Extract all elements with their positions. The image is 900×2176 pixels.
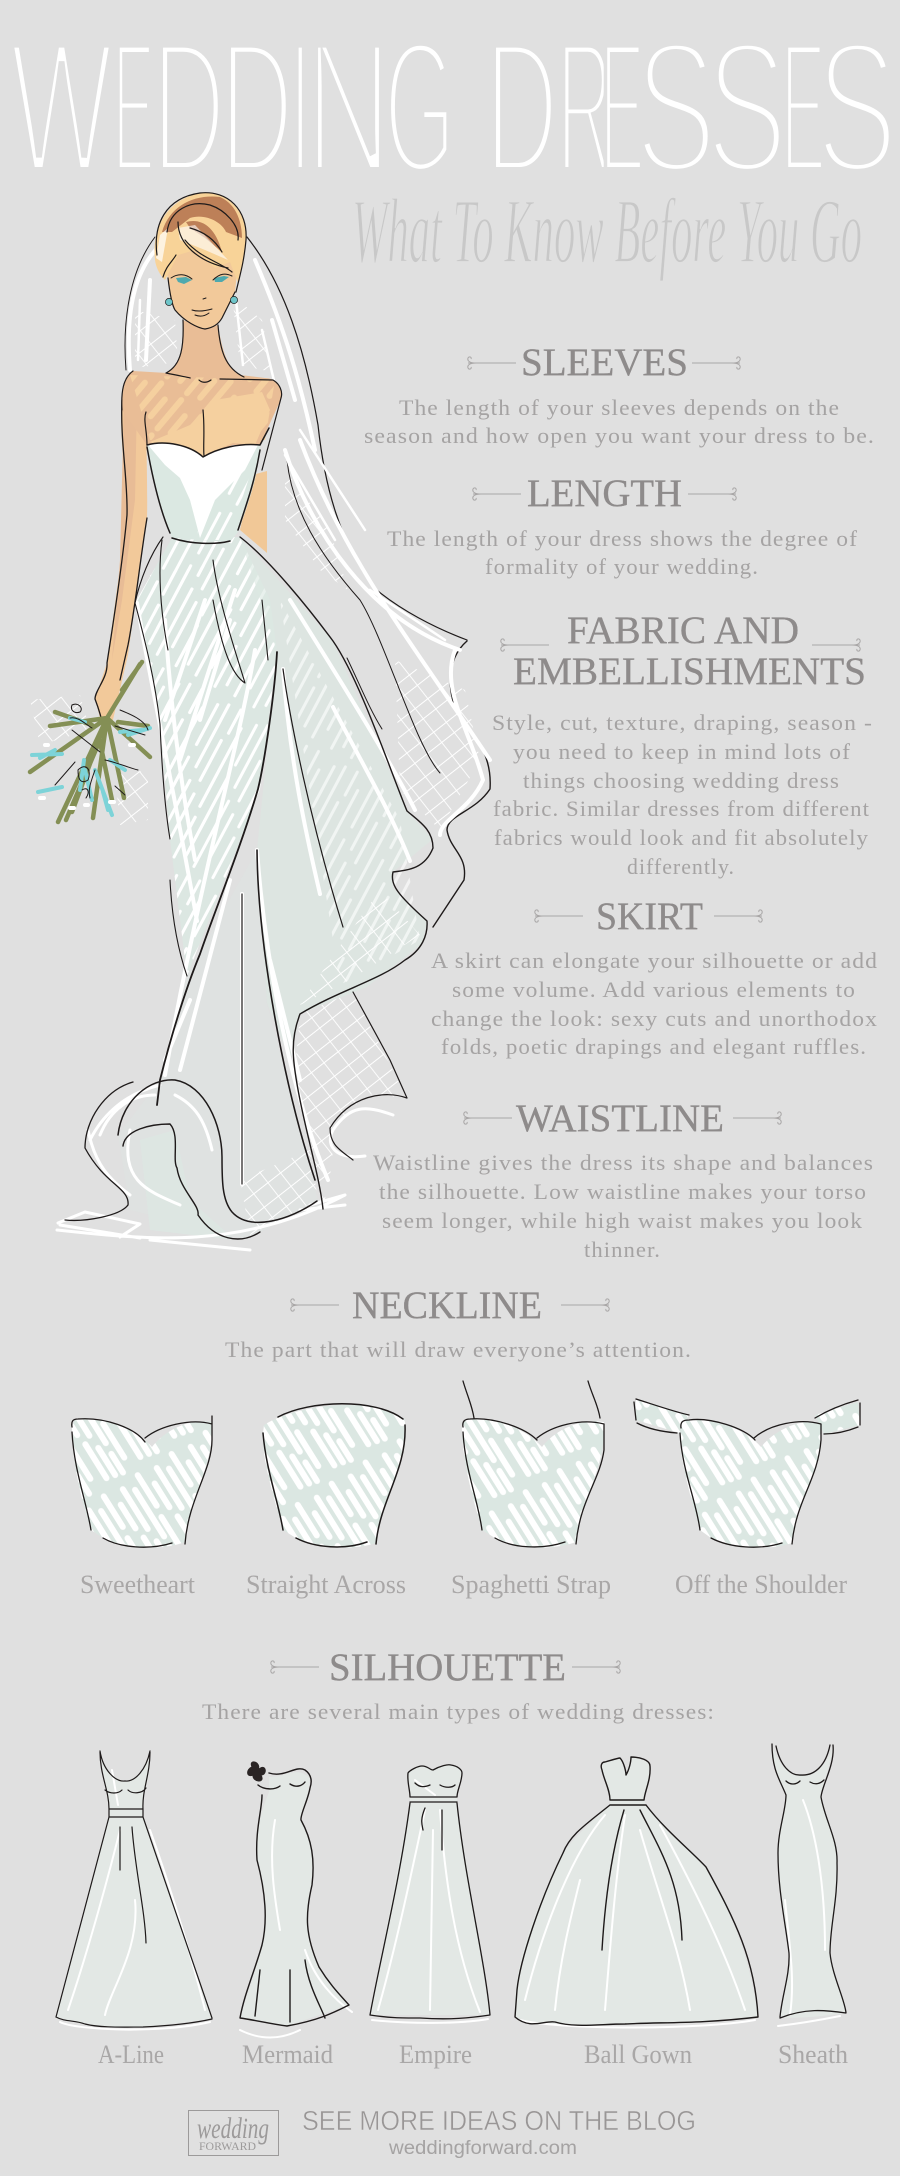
heading: EMBELLISHMENTS	[513, 650, 866, 693]
body text: fabrics would look and fit absolutely	[494, 825, 869, 850]
section: sleeves	[364, 341, 875, 448]
title: E	[781, 2, 826, 212]
ornament right	[688, 488, 736, 500]
heading: SILHOUETTE	[329, 1646, 566, 1689]
heading: SLEEVES	[521, 341, 688, 384]
body text: differently.	[627, 854, 735, 879]
left arm and hand	[95, 400, 147, 730]
title	[10, 2, 898, 212]
silhouette: mermaid	[240, 1762, 352, 2038]
silhouette: a-line	[56, 1751, 212, 2030]
section: skirt	[431, 895, 878, 1059]
body text: A skirt can elongate your silhouette or add	[431, 948, 878, 973]
neckline labels: Sweetheart	[80, 1570, 196, 1599]
title: S	[816, 2, 898, 212]
body text: Waistline gives the dress its shape and balances	[373, 1150, 874, 1175]
skirt	[57, 537, 433, 1250]
silhouette: sheath	[772, 1744, 846, 2026]
title: N	[305, 2, 392, 212]
torso skin	[122, 320, 282, 470]
body text: Style, cut, texture, draping, season -	[492, 710, 873, 735]
ornament left	[271, 1661, 319, 1673]
heading: WAISTLINE	[516, 1097, 724, 1140]
ornament left	[291, 1299, 339, 1311]
body text: fabric. Similar dresses from different	[493, 796, 870, 821]
title: S	[635, 2, 717, 212]
neckline: spaghetti strap	[462, 1381, 604, 1548]
title: D	[485, 2, 558, 212]
ornament left	[473, 488, 521, 500]
title: R	[557, 2, 613, 212]
title: I	[289, 2, 311, 212]
silhouette labels	[98, 2040, 848, 2069]
neckline labels	[80, 1570, 847, 1599]
bodice	[147, 428, 269, 543]
body text	[431, 948, 878, 1059]
body text: you need to keep in mind lots of	[513, 739, 851, 764]
title: E	[113, 2, 154, 212]
body text: things choosing wedding dress	[523, 768, 840, 793]
title: D	[220, 2, 293, 212]
title: E	[600, 2, 645, 212]
body text	[492, 710, 873, 879]
body text: thinner.	[584, 1237, 661, 1262]
head and hair	[155, 193, 246, 329]
silhouette labels: Empire	[399, 2040, 472, 2069]
ornament right	[714, 910, 762, 922]
body text	[387, 526, 858, 579]
heading: SKIRT	[596, 895, 703, 938]
section: fabric and embellishments	[492, 609, 873, 879]
heading: LENGTH	[527, 472, 682, 515]
heading: NECKLINE	[352, 1284, 542, 1327]
heading	[513, 609, 866, 693]
right arm	[240, 471, 267, 553]
flower	[248, 1762, 265, 1781]
body text: The part that will draw everyone’s attention.	[225, 1337, 692, 1362]
body text: The length of your dress shows the degree of	[387, 526, 858, 551]
section: waistline	[373, 1097, 874, 1262]
footer call to action: SEE MORE IDEAS ON THE BLOG	[302, 2105, 696, 2136]
title: W	[10, 2, 113, 212]
body text: The length of your sleeves depends on the	[399, 395, 840, 420]
body text: change the look: sexy cuts and unorthodox	[431, 1006, 878, 1031]
body text: season and how open you want your dress to be.	[364, 423, 875, 448]
silhouette labels: Mermaid	[242, 2040, 333, 2069]
ornament left	[535, 910, 583, 922]
body text: formality of your wedding.	[485, 554, 759, 579]
silhouette: empire	[370, 1765, 490, 2023]
logo: wedding forward	[188, 2110, 278, 2156]
neckline: sweetheart	[72, 1416, 212, 1548]
title: S	[706, 2, 788, 212]
title: D	[152, 2, 225, 212]
title: G	[384, 2, 456, 212]
ornament left	[464, 1112, 512, 1124]
section: length	[387, 472, 858, 579]
neckline: straight across	[263, 1404, 405, 1548]
illustration: bride in wedding dress	[30, 193, 490, 1250]
ornament right	[572, 1661, 620, 1673]
neckline: off the shoulder	[634, 1399, 860, 1548]
body text: some volume. Add various elements to	[452, 977, 856, 1002]
neckline labels: Straight Across	[246, 1570, 406, 1599]
section: neckline	[225, 1284, 692, 1362]
ornament left	[501, 639, 549, 651]
body text: the silhouette. Low waistline makes your torso	[379, 1179, 867, 1204]
silhouette: ball gown	[515, 1757, 758, 2028]
silhouette labels: Ball Gown	[584, 2040, 692, 2069]
ornament left	[468, 357, 516, 369]
section: silhouette	[202, 1646, 715, 1724]
bouquet	[30, 662, 150, 825]
heading: FABRIC AND	[567, 609, 799, 652]
silhouette labels: Sheath	[778, 2040, 848, 2069]
logo: wedding forward: wedding	[197, 2112, 269, 2145]
body text	[373, 1150, 874, 1262]
neckline labels: Spaghetti Strap	[451, 1570, 611, 1599]
neckline labels: Off the Shoulder	[675, 1570, 847, 1599]
body text: There are several main types of wedding dresses:	[202, 1699, 715, 1724]
body text	[364, 395, 875, 448]
footer url: weddingforward.com	[388, 2138, 577, 2159]
body text: folds, poetic drapings and elegant ruffles.	[441, 1034, 867, 1059]
silhouette labels: A-Line	[98, 2040, 164, 2069]
body text: seem longer, while high waist makes you look	[382, 1208, 863, 1233]
ornament right	[733, 1112, 781, 1124]
veil	[125, 237, 490, 927]
logo: wedding forward: FORWARD	[199, 2139, 256, 2153]
ornament right	[692, 357, 740, 369]
ornament right	[812, 639, 860, 651]
ornament right	[561, 1299, 609, 1311]
